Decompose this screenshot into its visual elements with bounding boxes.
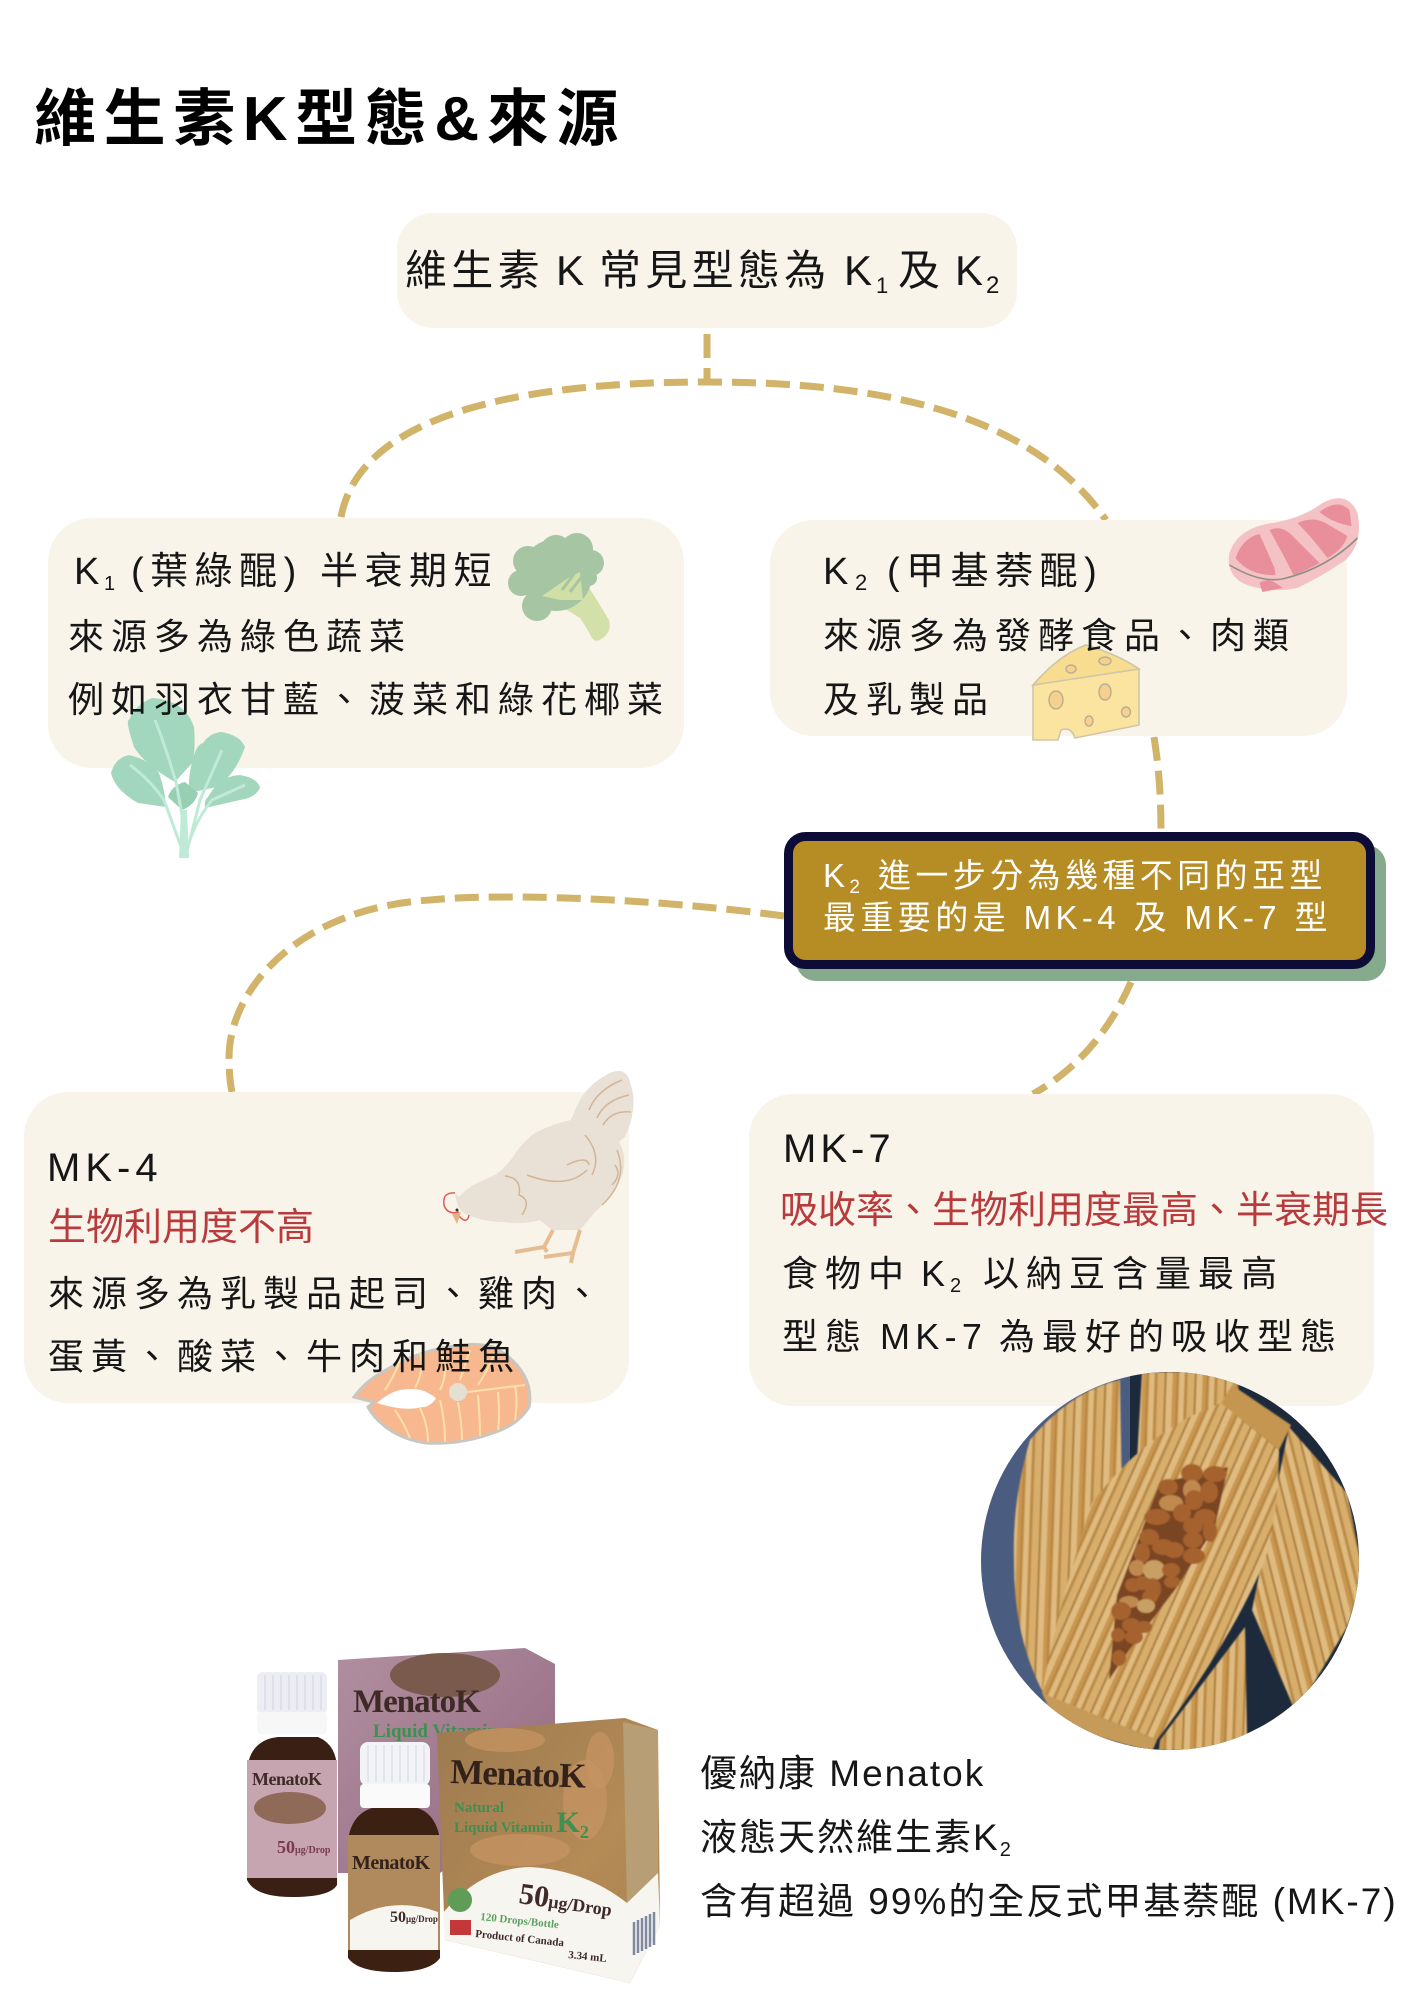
front box: Natural <box>454 1800 504 1816</box>
front box: Liquid Vitamin K₂ <box>454 1806 589 1839</box>
K1 description: 來源多為綠色蔬菜 <box>68 616 412 657</box>
MK-7 description: K <box>921 1253 952 1294</box>
left bottle <box>247 1672 337 1897</box>
K1 heading: 1 <box>104 573 115 595</box>
MK-7 description: 型態 <box>782 1316 868 1357</box>
callout text: K <box>823 857 849 894</box>
photo: natto in straw <box>981 1372 1359 1750</box>
panel: K2 <box>770 498 1359 740</box>
panel: intro <box>397 213 1017 328</box>
MK-4 description: 蛋黃、酸菜、牛肉和鮭魚 <box>48 1336 521 1377</box>
product description: 2 <box>1000 1839 1013 1861</box>
K1 heading: K <box>74 551 106 593</box>
intro text: 維生素 <box>405 247 544 294</box>
intro text: K <box>556 247 588 294</box>
dashed connector: subtype box to MK-4 <box>229 897 784 1092</box>
callout text <box>823 857 1332 936</box>
MK-4 heading: MK-4 <box>47 1146 163 1190</box>
icon: cheese <box>1033 645 1139 740</box>
intro text: 2 <box>986 272 999 299</box>
left bottle: MenatoK <box>252 1769 322 1789</box>
intro text: K <box>955 247 987 294</box>
left bottle: 50μg/Drop <box>277 1837 331 1857</box>
title: 維生素K型態&來源 <box>34 85 626 154</box>
product description: 液態天然維生素K <box>700 1817 1000 1858</box>
icon: steak <box>1229 498 1359 592</box>
MK-7 description: 2 <box>950 1275 968 1297</box>
K2 description: 來源多為發酵食品、肉類 <box>823 615 1296 656</box>
product description <box>700 1753 1398 1922</box>
front box: 120 Drops/Bottle <box>480 1911 560 1931</box>
callout text: 2 <box>849 877 864 898</box>
front box <box>437 1718 660 1983</box>
purple box <box>338 1648 555 1873</box>
icon: hen <box>444 1071 634 1263</box>
intro text: 常見型態為 <box>599 247 831 294</box>
MK-7 heading: MK-7 <box>783 1127 895 1171</box>
intro text: K <box>844 247 876 294</box>
MK-7 description: 食物中 <box>782 1253 911 1294</box>
dashed connector: subtype box to MK-7 <box>1033 982 1131 1094</box>
K2 description <box>823 615 1296 720</box>
product description: 優納康 Menatok <box>700 1753 985 1794</box>
intro text: 1 <box>876 273 888 298</box>
callout shadow <box>796 845 1386 981</box>
front box: 3.34 mL <box>568 1949 607 1965</box>
panel: K1 <box>48 518 684 858</box>
K2 heading: (甲基萘醌) <box>887 551 1103 593</box>
callout box <box>788 836 1370 964</box>
K1 description: 例如羽衣甘藍、菠菜和綠花椰菜 <box>68 679 670 720</box>
dashed connector: top box to K1 and K2 <box>341 334 1106 520</box>
purple box: MenatoK <box>353 1684 481 1720</box>
product description: 含有超過 99%的全反式甲基萘醌 (MK-7) <box>700 1881 1398 1922</box>
panel: subtype callout <box>788 836 1386 981</box>
K1 description <box>68 616 670 720</box>
panel: MK-7 <box>749 1094 1388 1406</box>
front bottle: MenatoK <box>352 1852 431 1874</box>
K1 heading: 半衰期短 <box>320 551 498 593</box>
icon: salmon <box>354 1344 530 1443</box>
MK-4 description <box>48 1273 607 1377</box>
K2 description: 及乳製品 <box>823 679 995 720</box>
front bottle: 50μg/Drop <box>390 1909 438 1926</box>
photo: Menatok products <box>247 1648 660 1983</box>
panel: MK-4 <box>24 1071 634 1443</box>
front box: Product of Canada <box>475 1928 565 1949</box>
MK-7 description: 為最好的吸收型態 <box>999 1316 1343 1357</box>
MK-7 description <box>782 1253 1343 1357</box>
front bottle <box>348 1742 440 1972</box>
MK-4 highlight: 生物利用度不高 <box>48 1207 314 1249</box>
MK-7 description: 以納豆含量最高 <box>983 1253 1284 1294</box>
icon: broccoli <box>508 533 610 641</box>
K1 heading: (葉綠醌) <box>131 551 303 593</box>
K2 heading: K <box>823 551 855 593</box>
MK-7 description: MK-7 <box>880 1316 987 1357</box>
MK-4 description: 來源多為乳製品起司、雞肉、 <box>48 1273 607 1314</box>
dashed connector: K2 to subtype box <box>1154 737 1161 832</box>
MK-7 highlight: 吸收率、生物利用度最高、半衰期長 <box>780 1190 1388 1232</box>
purple box: Liquid Vitamin <box>373 1721 499 1742</box>
front box: MenatoK <box>450 1752 587 1796</box>
natto beans <box>1111 1464 1227 1666</box>
K2 heading: 2 <box>855 570 867 595</box>
callout text: 最重要的是 MK-4 及 MK-7 型 <box>823 899 1332 936</box>
callout text: 進一步分為幾種不同的亞型 <box>864 857 1327 894</box>
front box: 50μg/Drop <box>517 1877 615 1923</box>
intro text: 及 <box>898 247 944 294</box>
icon: spinach <box>111 698 260 858</box>
